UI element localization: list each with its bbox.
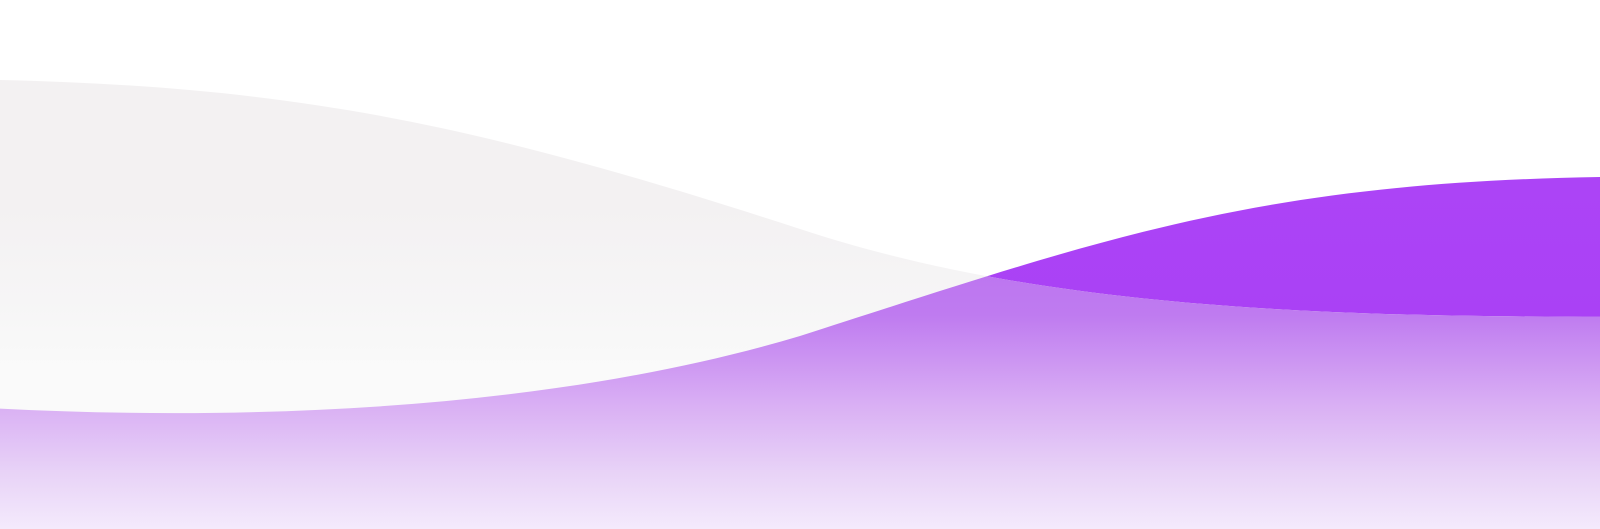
purple wave xyxy=(800,177,1600,340)
lavender fade band xyxy=(0,276,1600,529)
light grey wave xyxy=(0,80,1580,336)
